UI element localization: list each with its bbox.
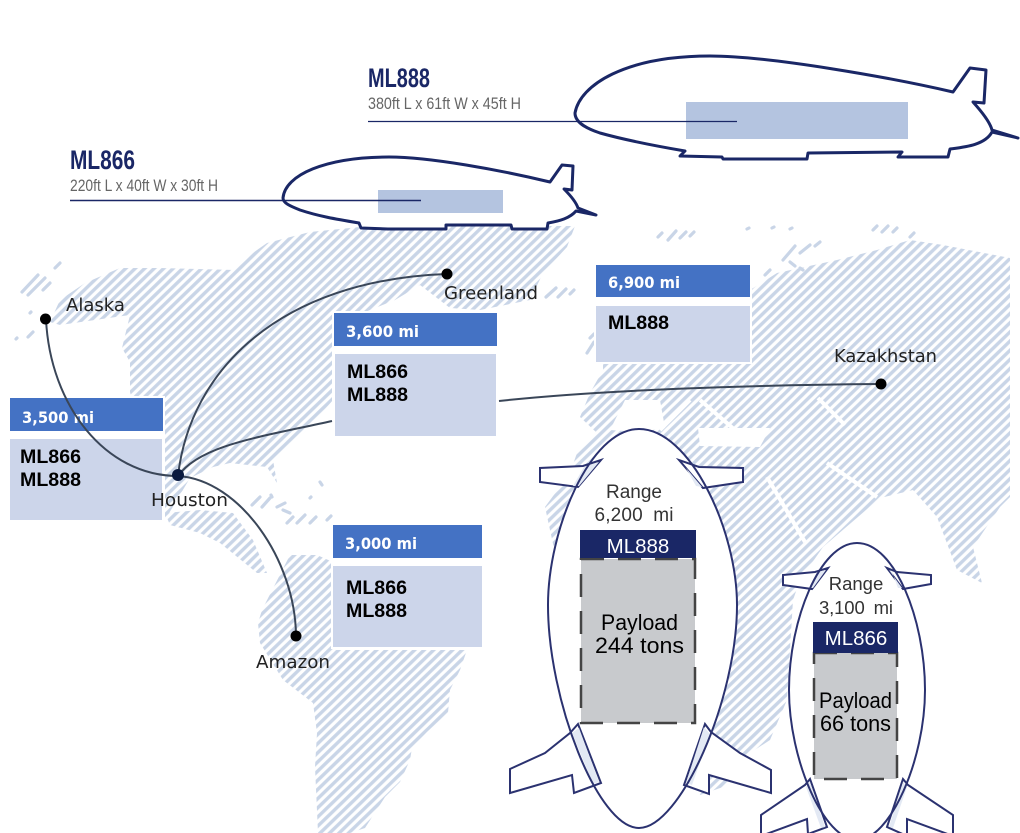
place labels: Houston [151,490,228,511]
payload label: Payload [819,688,892,713]
tail fins [540,460,601,487]
top view aircraft: ML888: ML888 [607,535,669,558]
payload box [814,653,897,779]
place labels: Kazakhstan [834,346,937,367]
route distance box: 6,900 mi: 6,900 mi [608,273,680,292]
outline: ML888 blimp [575,56,1018,159]
cargo bay: ML888 [686,102,908,139]
hull fill [548,429,737,828]
top view aircraft: ML888: 6,200 mi [594,505,674,526]
tail fins [783,568,828,589]
cargo bay: ML866 [378,190,503,213]
route distance box: 3,600 mi: ML866 [347,362,408,383]
route distance box: 3,500 mi: ML888 [20,470,81,491]
route distance box: 3,000 mi: ML888 [346,601,407,622]
ML888 blimp group [368,56,1018,159]
heading: ML888: ML888 [368,63,430,93]
top view aircraft: ML866: 3,100 mi [819,597,893,618]
place labels [66,283,937,673]
model header [813,622,898,653]
hull outline [789,543,925,833]
place labels: Greenland [444,283,538,304]
ML866 blimp group [70,145,596,229]
world map hatching [0,215,1020,833]
dimensions: ML866: 220ft L x 40ft W x 30ft H [70,177,218,195]
route distance box: 3,500 mi [8,396,165,522]
hull outline [548,429,737,828]
top view aircraft: ML888: 244 tons [595,633,684,658]
wings [761,779,827,833]
range label: Range [829,573,883,594]
leader line: ML888 [368,120,737,122]
outline: ML866 blimp [283,157,596,229]
hull fill [789,543,925,833]
top view aircraft: ML866: ML866 [825,627,887,650]
range label: Range [606,482,662,503]
route distance box: 3,000 mi: 3,000 mi [345,534,417,553]
top view aircraft: ML866: 66 tons [820,711,891,736]
top view aircraft: ML866 [761,543,953,833]
route distance box: 3,000 mi: ML866 [346,578,407,599]
route distance box: 6,900 mi: ML888 [608,313,669,334]
place labels: Alaska [66,295,125,316]
payload label: Payload [601,610,678,635]
route network from Houston [40,268,886,642]
model header [580,530,696,558]
dimensions: ML888: 380ft L x 61ft W x 45ft H [368,95,521,113]
route distance box: 3,500 mi: ML866 [20,447,81,468]
top view aircraft: ML888 [510,429,771,828]
wings [510,724,601,793]
route distance box: 3,500 mi: 3,500 mi [22,408,94,427]
route distance box: 3,000 mi [331,523,484,649]
route distance box: 6,900 mi [594,263,752,364]
leader line: ML866 [70,200,421,202]
route distance box: 3,600 mi: ML888 [347,385,408,406]
route distance box: 3,600 mi: 3,600 mi [346,322,419,341]
heading: ML866: ML866 [70,145,135,175]
place labels: Amazon [256,652,330,673]
wing root tints [806,570,907,828]
wing root tints [572,462,710,785]
payload box [581,559,695,723]
route distance box: 3,600 mi [332,311,499,438]
